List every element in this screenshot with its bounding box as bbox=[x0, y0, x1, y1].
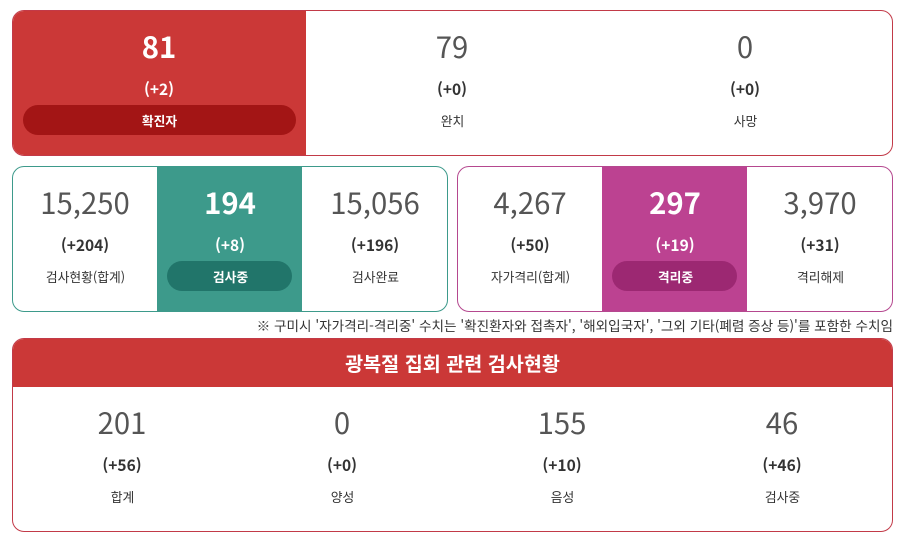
panel: confirmed cases summary bbox=[12, 10, 893, 156]
stat: recovered 79 bbox=[436, 25, 468, 130]
panel: self-quarantine status bbox=[457, 166, 893, 312]
panel: Liberation Day rally testing status: 검사중 bbox=[765, 487, 800, 506]
panel: Liberation Day rally testing status: 201 bbox=[98, 401, 146, 443]
stat: testing in progress 194 bbox=[167, 181, 292, 291]
panel: self-quarantine status: (+50) bbox=[510, 234, 550, 256]
panel: Liberation Day rally testing status: 46 bbox=[766, 401, 798, 443]
panel: testing status: 15,056 bbox=[330, 181, 420, 223]
panel: testing status: 검사중 bbox=[213, 267, 248, 286]
panel: Liberation Day rally testing status: 음성 bbox=[551, 487, 574, 506]
panel: Liberation Day rally testing status: 양성 bbox=[331, 487, 354, 506]
panel: testing status: 검사완료 bbox=[352, 267, 399, 286]
panel: testing status: (+8) bbox=[215, 234, 245, 256]
panel: Liberation Day rally testing status: 155 bbox=[538, 401, 586, 443]
panel: Liberation Day rally testing status: (+56) bbox=[102, 454, 142, 476]
panel heading: 광복절 집회 관련 검사현황 bbox=[345, 348, 560, 377]
highlighted block: confirmed bbox=[12, 10, 306, 156]
panel: testing status: (+204) bbox=[61, 234, 109, 256]
panel: testing status: (+196) bbox=[351, 234, 399, 256]
panel: self-quarantine status: (+31) bbox=[800, 234, 840, 256]
panel: confirmed cases summary: (+0) bbox=[730, 78, 760, 100]
panel: confirmed cases summary: 완치 bbox=[441, 111, 464, 130]
panel: testing status: 15,250 bbox=[40, 181, 130, 223]
panel: self-quarantine status: 4,267 bbox=[493, 181, 567, 223]
stat: positive 0 bbox=[327, 401, 357, 506]
panel: testing status bbox=[12, 166, 448, 312]
panel: self-quarantine status: 격리해제 bbox=[797, 267, 844, 286]
panel: testing status: 검사현황(합계) bbox=[46, 267, 125, 286]
stat: total quarantine 4,267 bbox=[491, 181, 570, 286]
panel: Liberation Day rally testing status: (+10) bbox=[542, 454, 582, 476]
stat: total tested 15,250 bbox=[40, 181, 130, 286]
panel: Liberation Day rally testing status: (+0) bbox=[327, 454, 357, 476]
panel: self-quarantine status: 자가격리(합계) bbox=[491, 267, 570, 286]
panel: self-quarantine status: 격리중 bbox=[658, 267, 693, 286]
panel: self-quarantine status: 3,970 bbox=[783, 181, 857, 223]
panel: Liberation Day rally testing status bbox=[12, 338, 893, 532]
panel heading bbox=[12, 338, 893, 387]
panel: self-quarantine status: (+19) bbox=[655, 234, 695, 256]
panel: confirmed cases summary: 확진자 bbox=[142, 111, 177, 130]
stat: confirmed 81 bbox=[23, 25, 296, 135]
panel: confirmed cases summary: 0 bbox=[737, 25, 753, 67]
panel: confirmed cases summary: 81 bbox=[142, 25, 176, 67]
panel: confirmed cases summary: (+0) bbox=[437, 78, 467, 100]
stat: negative 155 bbox=[538, 401, 586, 506]
stat: in testing 46 bbox=[762, 401, 802, 506]
panel: Liberation Day rally testing status: 0 bbox=[334, 401, 350, 443]
panel: confirmed cases summary: 79 bbox=[436, 25, 468, 67]
highlighted block: testing in progress bbox=[157, 166, 302, 312]
panel: testing status: 194 bbox=[204, 181, 256, 223]
footnote: ※ 구미시 '자가격리-격리중' 수치는 '확진환자와 접촉자', '해외입국자', '그외 기타(폐렴 증상 등)'를 포함한 수치임 bbox=[257, 315, 893, 335]
panel: confirmed cases summary: 사망 bbox=[734, 111, 757, 130]
panel: Liberation Day rally testing status: 합계 bbox=[111, 487, 134, 506]
stat: deaths 0 bbox=[730, 25, 760, 130]
stat: total 201 bbox=[98, 401, 146, 506]
stat: quarantine released 3,970 bbox=[783, 181, 857, 286]
panel: Liberation Day rally testing status: (+46) bbox=[762, 454, 802, 476]
stat: testing complete 15,056 bbox=[330, 181, 420, 286]
highlighted block: in quarantine bbox=[602, 166, 747, 312]
panel: confirmed cases summary: (+2) bbox=[144, 78, 174, 100]
stat: in quarantine 297 bbox=[612, 181, 737, 291]
panel: self-quarantine status: 297 bbox=[649, 181, 701, 223]
